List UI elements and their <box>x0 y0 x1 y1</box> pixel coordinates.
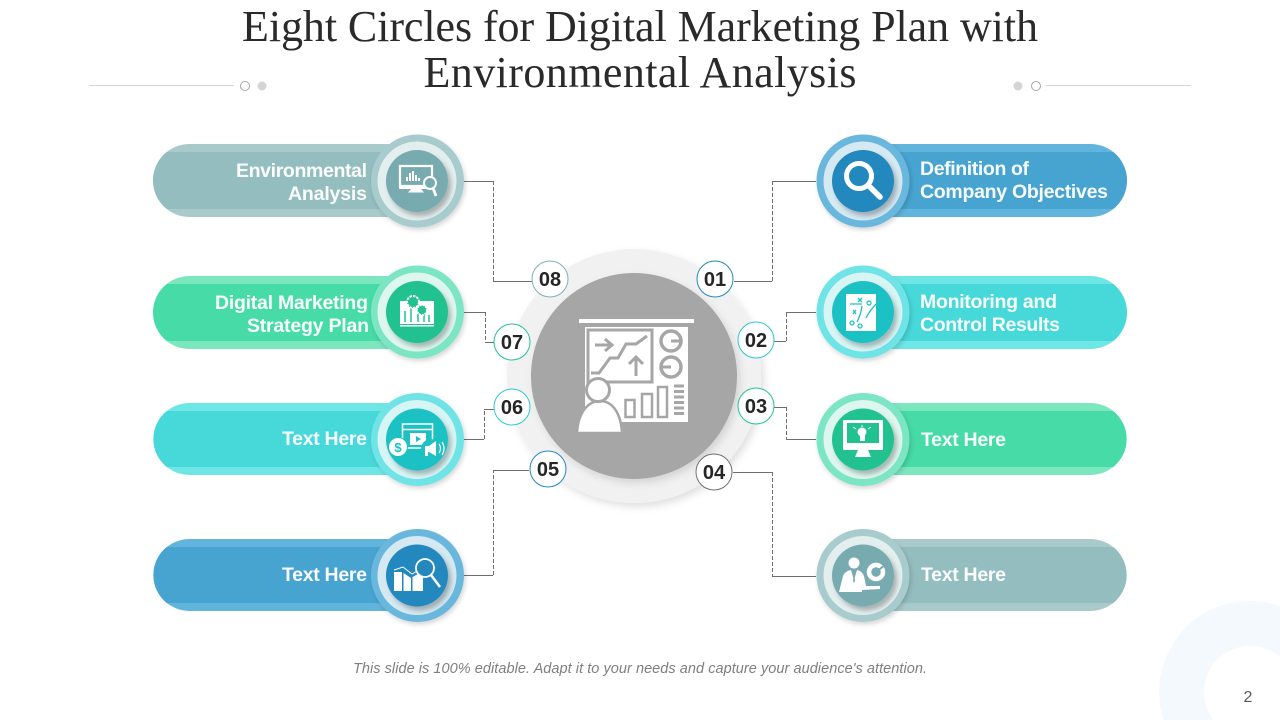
panel: Environmental Analysis <box>153 134 464 228</box>
icon: video ad with dollar and megaphone <box>388 424 444 459</box>
badge 05 <box>530 451 566 487</box>
panel: Definition of Company Objectives: Definition of <box>920 158 1030 180</box>
panel: left Text Here cyan <box>153 393 464 486</box>
badge 01: 01 <box>704 269 726 291</box>
badge 08 <box>532 261 568 297</box>
badge 02: 02 <box>745 330 767 352</box>
badge 04 <box>696 454 732 490</box>
badge 07: 07 <box>501 332 523 354</box>
icon: monitor with light bulb <box>843 420 883 457</box>
panel: left Text Here cyan: Text Here <box>282 428 367 450</box>
panel: Environmental Analysis: Environmental <box>236 160 367 182</box>
badge 02 <box>738 322 774 358</box>
number badges <box>494 261 774 490</box>
icon: monitor with magnifier <box>399 166 436 196</box>
badge 03: 03 <box>745 396 767 418</box>
panel: Monitoring and Control Results: Monitoring and <box>920 291 1057 313</box>
central hub <box>507 249 761 503</box>
panel: left Text Here blue: Text Here <box>282 564 367 586</box>
header ornament right <box>1014 82 1191 90</box>
panel: right Text Here green <box>816 393 1127 486</box>
icon: gears and chart board <box>400 296 434 326</box>
title: Eight Circles for Digital Marketing Plan with <box>242 2 1038 51</box>
icon: strategy plan sheet <box>846 294 878 331</box>
badge 05: 05 <box>537 459 559 481</box>
icon: presenter with dashboard <box>577 319 694 433</box>
panel: Environmental Analysis: Analysis <box>288 183 367 205</box>
panel: Definition of Company Objectives <box>816 134 1127 228</box>
badge 06 <box>494 389 530 425</box>
badge 08: 08 <box>539 269 561 291</box>
background corner ring <box>1159 601 1280 720</box>
connectors <box>464 181 816 576</box>
panel: right Text Here grey-teal <box>816 529 1127 622</box>
panel: right Text Here green: Text Here <box>921 429 1006 451</box>
page number: 2 <box>1244 689 1253 706</box>
badge 07 <box>494 324 530 360</box>
panel: Digital Marketing Strategy Plan: Strategy Plan <box>247 315 369 337</box>
badge 06: 06 <box>501 397 523 419</box>
header ornament left <box>89 82 266 90</box>
panel: Digital Marketing Strategy Plan <box>153 266 464 358</box>
panel: Definition of Company Objectives: Company Objectives <box>920 181 1108 203</box>
panel: Digital Marketing Strategy Plan: Digital Marketing <box>215 292 368 314</box>
icon: magnifying glass <box>846 164 880 197</box>
footer note: This slide is 100% editable. Adapt it to your needs and capture your audience's attention. <box>353 661 927 677</box>
badge 01 <box>697 261 733 297</box>
icon: businessman with pie chart <box>839 558 885 592</box>
panel: Monitoring and Control Results <box>816 266 1127 358</box>
badge 04: 04 <box>703 462 726 484</box>
badge 03 <box>738 388 774 424</box>
panel: right Text Here grey-teal: Text Here <box>921 564 1006 586</box>
title <box>242 2 1038 97</box>
panel: left Text Here blue <box>153 529 464 622</box>
icon: bars with magnifier <box>394 559 440 591</box>
icon: video ad with dollar and megaphone: $ <box>394 440 402 455</box>
title: Environmental Analysis <box>424 48 856 97</box>
panel: Monitoring and Control Results: Control Results <box>920 314 1060 336</box>
